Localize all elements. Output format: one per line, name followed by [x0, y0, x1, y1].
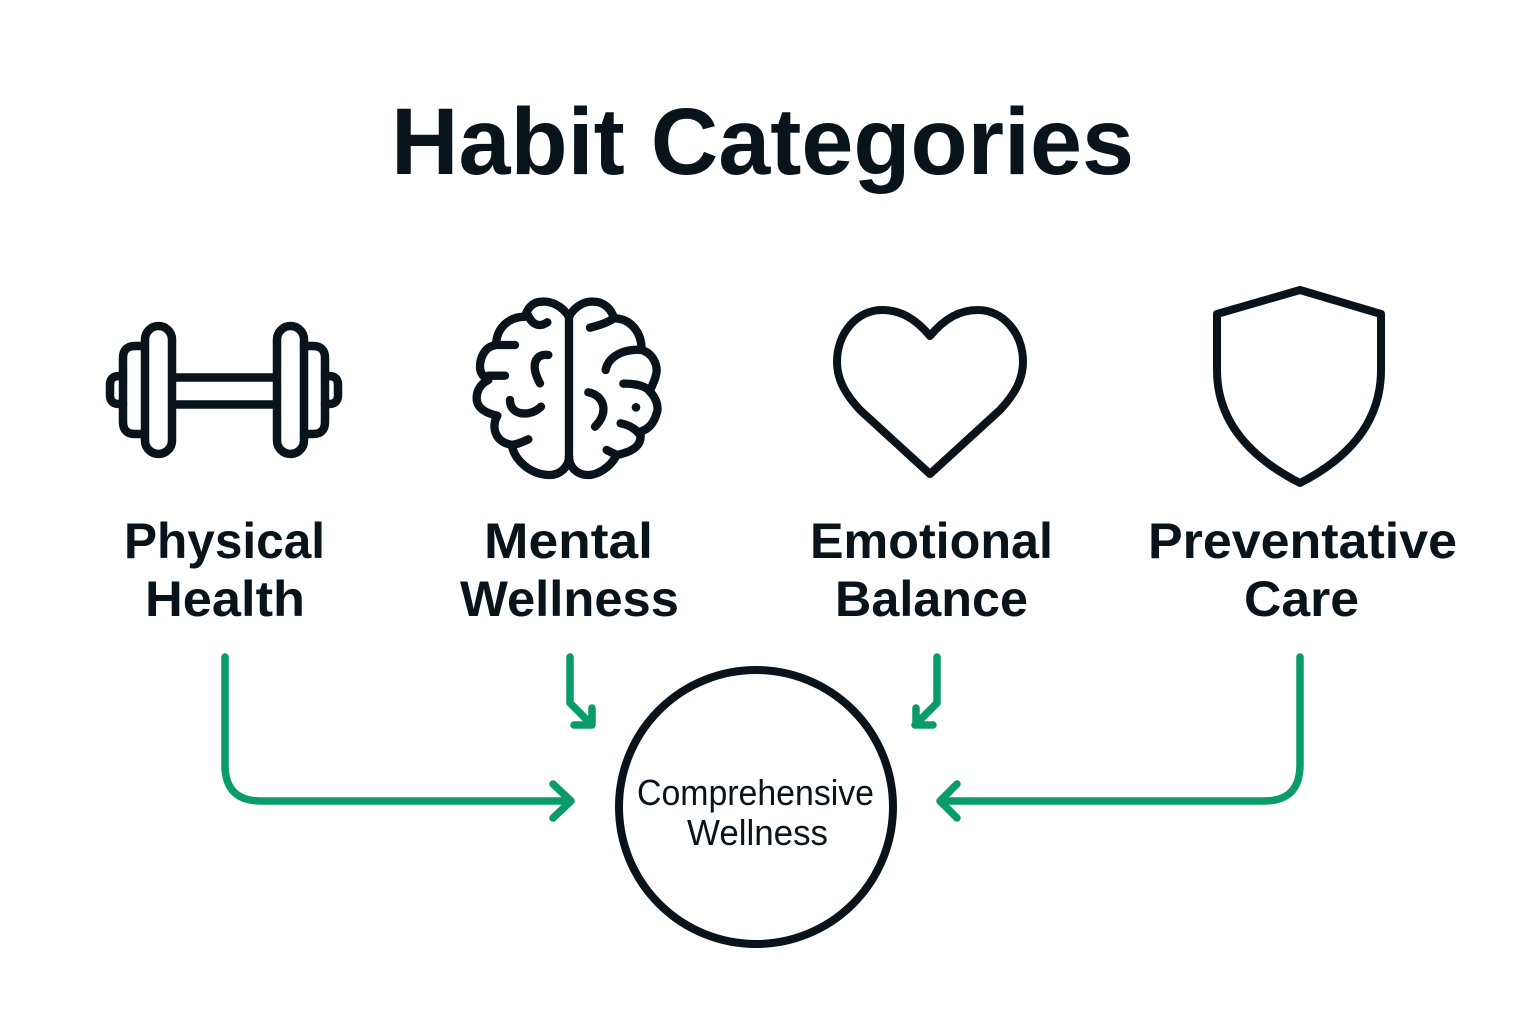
label: physical health: Physical: [124, 513, 325, 569]
label: physical health: [124, 513, 325, 627]
icon: shield: [1217, 290, 1381, 483]
label: preventative care: Preventative: [1148, 513, 1457, 569]
center circle: comprehensive wellness: Comprehensive: [637, 772, 874, 813]
label: emotional balance: Balance: [835, 571, 1028, 627]
arrow: mental wellness to center: [570, 657, 592, 725]
icon: heart: [837, 310, 1023, 474]
label: emotional balance: Emotional: [810, 513, 1053, 569]
label: mental wellness: Wellness: [460, 571, 679, 627]
arrow: physical health to center: [225, 657, 571, 818]
center circle: comprehensive wellness: [619, 670, 893, 944]
arrow: preventative care to center: [940, 657, 1300, 818]
label: mental wellness: Mental: [484, 513, 653, 569]
center circle: comprehensive wellness: Wellness: [687, 812, 828, 853]
label: mental wellness: [460, 513, 679, 627]
label: physical health: Health: [145, 571, 305, 627]
label: preventative care: Care: [1244, 571, 1359, 627]
icon: brain: [477, 302, 658, 475]
arrow: emotional balance to center: [915, 657, 937, 725]
label: emotional balance: [810, 513, 1053, 627]
title: Habit Categories: [391, 89, 1134, 195]
label: preventative care: [1148, 513, 1457, 627]
icon: dumbbell: [110, 326, 338, 454]
